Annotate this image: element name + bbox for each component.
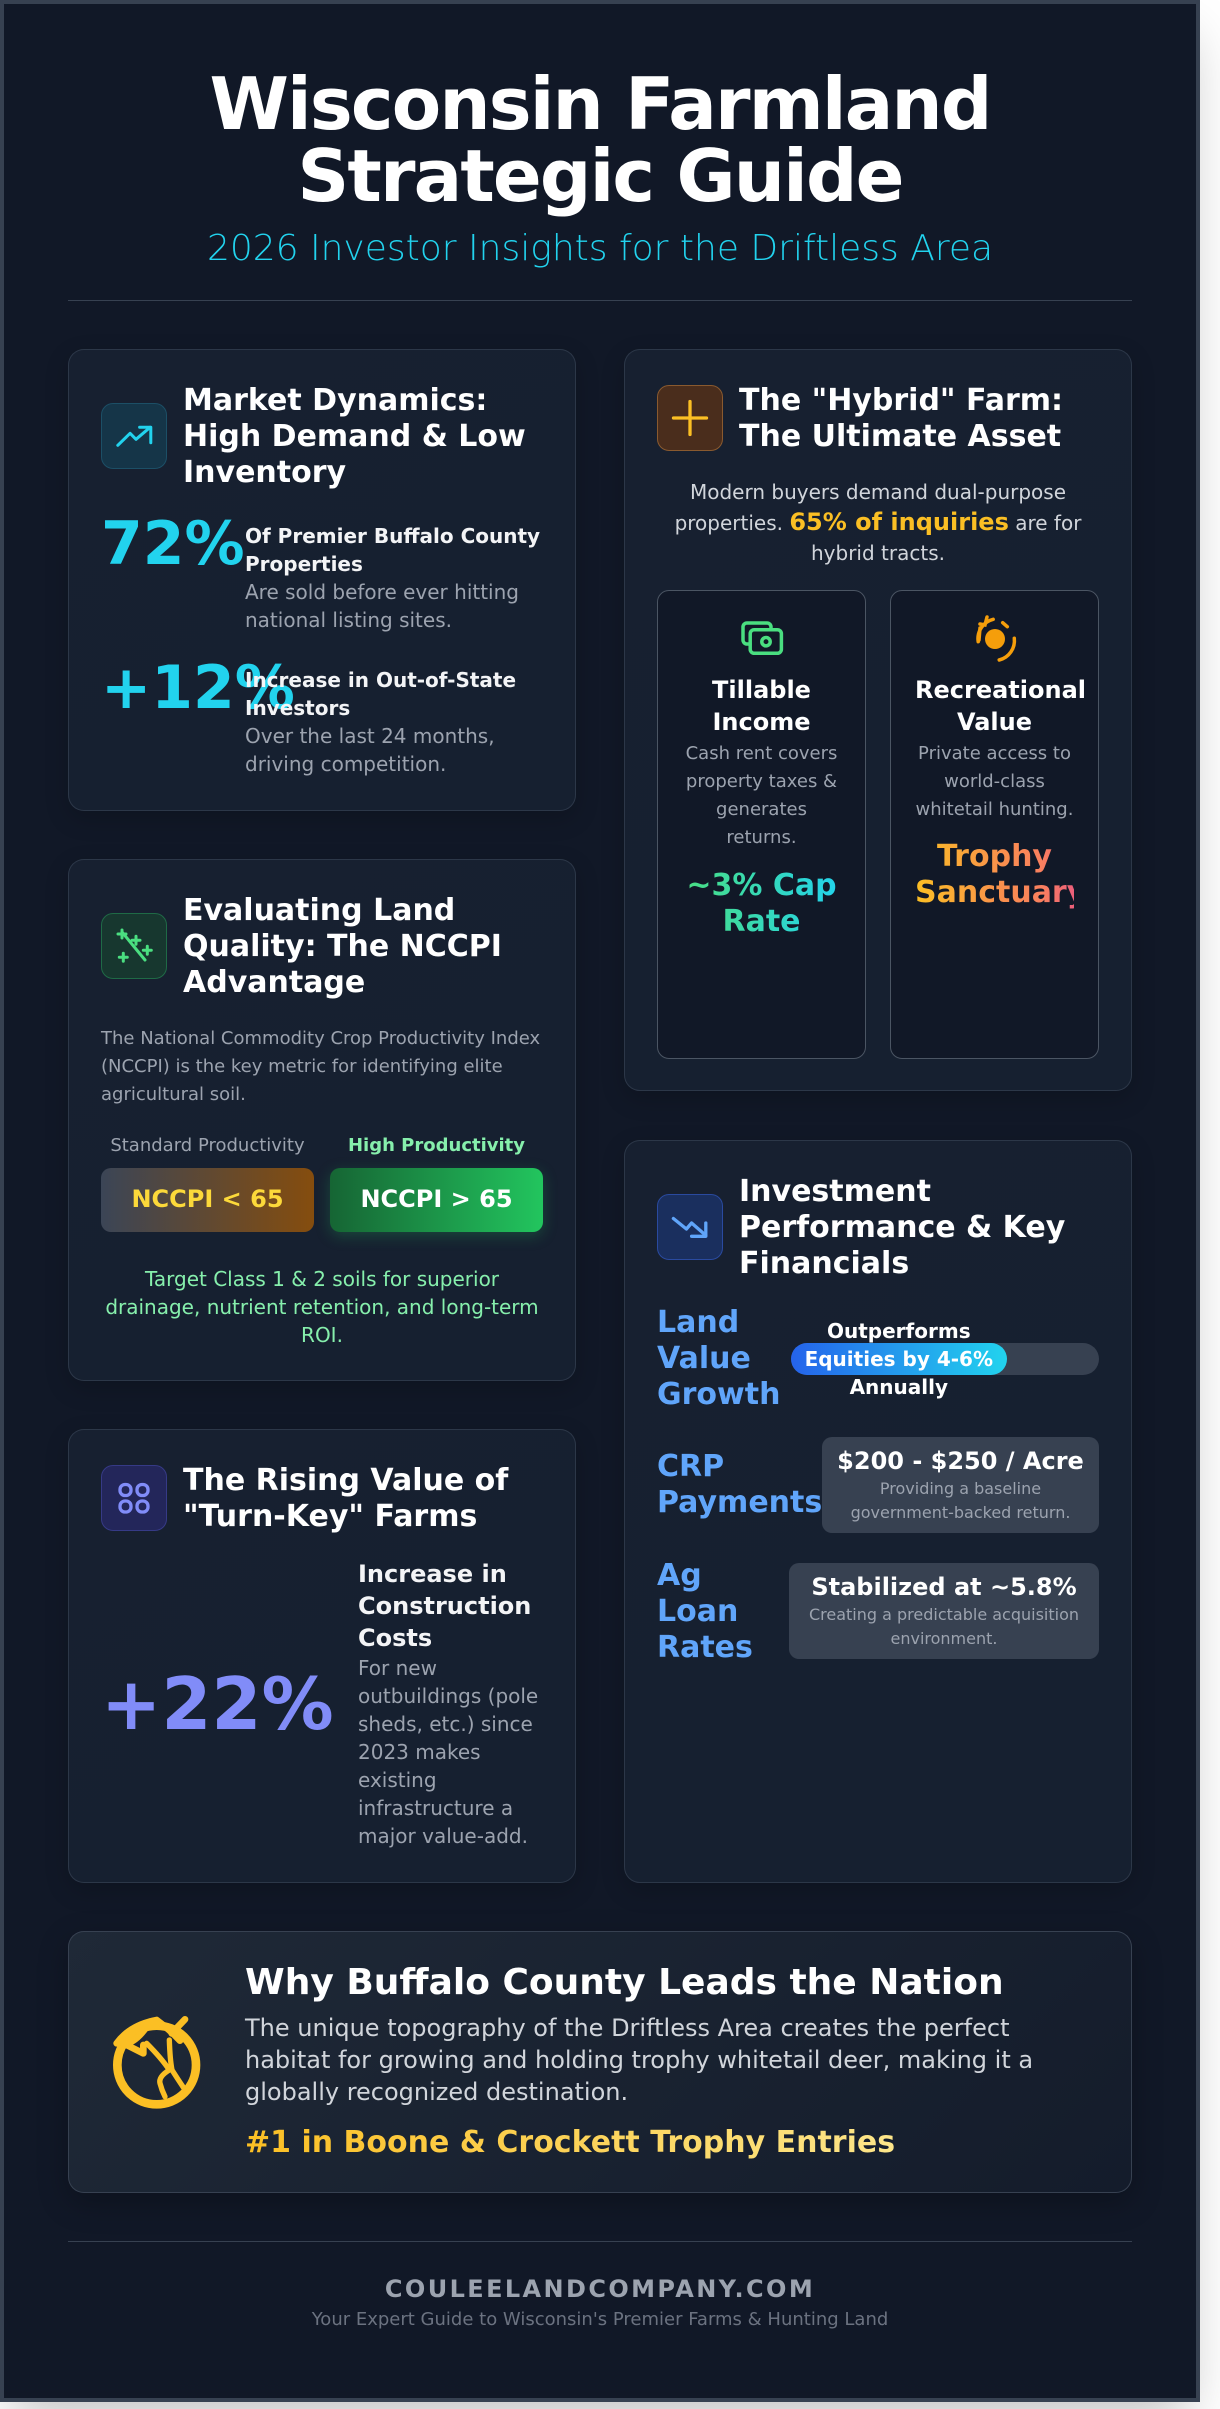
value: trophy sanctuary xyxy=(915,839,1074,911)
stat text: construction costs: Costs xyxy=(358,1624,432,1652)
intro text: The National Commodity Crop Productivity Index xyxy=(101,1028,540,1048)
callout heading: Why Buffalo County Leads the Nation xyxy=(245,1962,1004,2003)
stat text: +12%: Investors xyxy=(245,696,350,720)
intro text xyxy=(100,1028,540,1104)
stat text: 72%: national listing sites. xyxy=(245,608,452,632)
icon: soil sparkle xyxy=(101,913,167,979)
comparison: NCCPI below 65: NCCPI < 65 xyxy=(131,1185,284,1213)
footer: website: COULEELANDCOMPANY.COM xyxy=(385,2275,815,2303)
heading xyxy=(183,893,502,1000)
comparison: NCCPI below 65 xyxy=(101,1168,314,1232)
intro text: properties. 65% of inquiries are for xyxy=(675,508,1081,536)
stat text: +12%: driving competition. xyxy=(245,752,446,776)
description: Cash rent covers xyxy=(686,743,837,764)
heading: The "Hybrid" Farm: xyxy=(739,383,1063,418)
callout body: The unique topography of the Driftless Area creates the perfect xyxy=(245,2014,1009,2042)
title xyxy=(209,62,991,218)
heading xyxy=(183,1463,509,1534)
sub-heading: Recreational xyxy=(915,676,1086,704)
heading xyxy=(183,383,526,490)
progress bar: outperforms equities xyxy=(791,1343,1099,1375)
stat: +22%: +22% xyxy=(101,1662,334,1746)
icon: plus xyxy=(657,385,723,451)
row label: CRP payments: CRP xyxy=(657,1449,724,1484)
icon: trending down xyxy=(657,1194,723,1260)
heading: Quality: The NCCPI xyxy=(183,929,502,964)
row label: land value growth xyxy=(657,1305,780,1412)
value: trophy sanctuary: Sanctuary xyxy=(915,875,1086,910)
icon: trending up xyxy=(101,403,167,469)
value: cap rate: ~3% Cap xyxy=(686,868,837,903)
row label: land value growth: Land xyxy=(657,1305,739,1340)
heading: The Ultimate Asset xyxy=(739,419,1061,454)
heading: Evaluating Land xyxy=(183,893,455,928)
stat text: +12% xyxy=(245,668,516,776)
stat text: construction costs: Construction xyxy=(358,1592,531,1620)
row label: land value growth: Value xyxy=(657,1341,751,1376)
value box: CRP xyxy=(822,1437,1099,1533)
heading: Financials xyxy=(739,1246,909,1281)
icon: four circles xyxy=(101,1465,167,1531)
comparison: NCCPI above 65: NCCPI > 65 xyxy=(360,1185,513,1213)
heading: Market Dynamics: xyxy=(183,383,487,418)
intro text: Modern buyers demand dual-purpose xyxy=(690,480,1066,504)
sub-heading: Income xyxy=(712,708,810,736)
stat text: +12%: Over the last 24 months, xyxy=(245,724,495,748)
bar fill xyxy=(791,1343,1007,1375)
label: high productivity: High Productivity xyxy=(348,1135,525,1156)
row label: CRP payments: Payments xyxy=(657,1485,822,1520)
panel: market dynamics xyxy=(68,349,576,811)
subtitle: 2026 Investor Insights for the Driftless Area xyxy=(207,228,993,269)
description: world-class xyxy=(944,771,1045,792)
stat text: +12%: Increase in Out-of-State xyxy=(245,668,516,692)
description xyxy=(916,743,1073,820)
bar label xyxy=(805,1319,993,1399)
callout body: habitat for growing and holding trophy whitetail deer, making it a xyxy=(245,2046,1033,2074)
value box: CRP: $200 - $250 / Acre xyxy=(837,1447,1084,1475)
heading: Investment xyxy=(739,1174,931,1209)
heading: Performance & Key xyxy=(739,1210,1065,1245)
icon: cash xyxy=(741,621,784,655)
stat text: 72%: Properties xyxy=(245,552,363,576)
heading: Advantage xyxy=(183,965,365,1000)
row label: ag loan rates: Ag xyxy=(657,1558,702,1593)
stat: +12%: +12% xyxy=(101,653,295,723)
value box: ag loan: environment. xyxy=(890,1629,997,1648)
stat text: construction costs: outbuildings (pole xyxy=(358,1684,538,1708)
icon: globe and antlers xyxy=(113,2016,200,2109)
intro text: hybrid tracts. xyxy=(811,541,945,565)
takeaway note xyxy=(105,1267,539,1347)
sub-heading xyxy=(915,676,1086,736)
stat text: construction costs: Increase in xyxy=(358,1560,507,1588)
row label: ag loan rates: Rates xyxy=(657,1630,753,1665)
row label: ag loan rates: Loan xyxy=(657,1594,738,1629)
stat: 72%: 72% xyxy=(101,509,245,579)
value box: ag loan: Creating a predictable acquisition xyxy=(809,1605,1079,1624)
row label: land value growth: Growth xyxy=(657,1377,780,1412)
stat text: construction costs: infrastructure a xyxy=(358,1796,513,1820)
stat text: construction costs: major value-add. xyxy=(358,1824,528,1848)
sub-heading: Value xyxy=(957,708,1032,736)
description xyxy=(686,743,837,848)
stat text: construction costs: For new xyxy=(358,1656,437,1680)
value box: ag loan xyxy=(789,1563,1099,1659)
description: Private access to xyxy=(918,743,1071,764)
value box: CRP: Providing a baseline xyxy=(880,1479,1041,1498)
panel: land quality xyxy=(68,859,576,1381)
callout: buffalo county xyxy=(68,1931,1132,2193)
icon: target orbit xyxy=(976,615,1016,662)
title: Wisconsin Farmland xyxy=(209,62,991,146)
heading: High Demand & Low xyxy=(183,419,526,454)
bar label: Equities by 4-6% xyxy=(805,1347,993,1371)
heading: Inventory xyxy=(183,455,346,490)
bar label: Outperforms xyxy=(827,1319,971,1343)
label: standard productivity: Standard Productivity xyxy=(110,1135,305,1156)
takeaway note: ROI. xyxy=(301,1323,343,1347)
comparison: NCCPI above 65 xyxy=(330,1168,543,1232)
value box: ag loan: Stabilized at ~5.8% xyxy=(811,1573,1077,1601)
stat text: 72% xyxy=(245,524,540,632)
intro text xyxy=(675,480,1082,565)
heading: The Rising Value of xyxy=(183,1463,508,1498)
description: whitetail hunting. xyxy=(916,799,1073,820)
stat text: construction costs: existing xyxy=(358,1768,437,1792)
sub-panel: recreational value xyxy=(890,590,1099,1059)
stat text: construction costs xyxy=(358,1560,538,1848)
value: trophy sanctuary: Trophy xyxy=(937,839,1052,874)
description: property taxes & xyxy=(686,771,837,792)
value box: CRP: government-backed return. xyxy=(851,1503,1070,1522)
heading: "Turn-Key" Farms xyxy=(183,1499,477,1534)
footer: tagline: Your Expert Guide to Wisconsin's Premier Farms & Hunting Land xyxy=(312,2309,888,2330)
bar label: Annually xyxy=(850,1375,948,1399)
callout body xyxy=(244,2014,1033,2106)
description: generates xyxy=(716,799,807,820)
heading xyxy=(739,383,1063,454)
panel: hybrid farm xyxy=(624,349,1132,1091)
description: returns. xyxy=(726,827,797,848)
value: cap rate: Rate xyxy=(722,904,801,939)
stat text: construction costs: sheds, etc.) since xyxy=(358,1712,533,1736)
takeaway note: Target Class 1 & 2 soils for superior xyxy=(145,1267,499,1291)
row label: ag loan rates xyxy=(657,1558,753,1665)
callout stat: #1 in Boone & Crockett Trophy Entries xyxy=(245,2125,895,2160)
callout body: globally recognized destination. xyxy=(245,2078,628,2106)
takeaway note: drainage, nutrient retention, and long-term xyxy=(105,1295,539,1319)
title: Strategic Guide xyxy=(297,134,903,218)
sub-heading xyxy=(712,676,811,736)
stat text: 72%: Are sold before ever hitting xyxy=(245,580,519,604)
panel: investment performance xyxy=(624,1140,1132,1883)
stat text: construction costs: 2023 makes xyxy=(358,1740,481,1764)
sub-panel: tillable income xyxy=(657,590,866,1059)
panel: turn-key farms xyxy=(68,1429,576,1883)
sub-heading: Tillable xyxy=(712,676,811,704)
row label: CRP payments xyxy=(657,1449,822,1520)
intro text: agricultural soil. xyxy=(101,1084,246,1104)
heading xyxy=(739,1174,1065,1281)
stat text: 72%: Of Premier Buffalo County xyxy=(245,524,540,548)
intro text: (NCCPI) is the key metric for identifying elite xyxy=(101,1056,503,1076)
value: cap rate xyxy=(682,868,841,940)
